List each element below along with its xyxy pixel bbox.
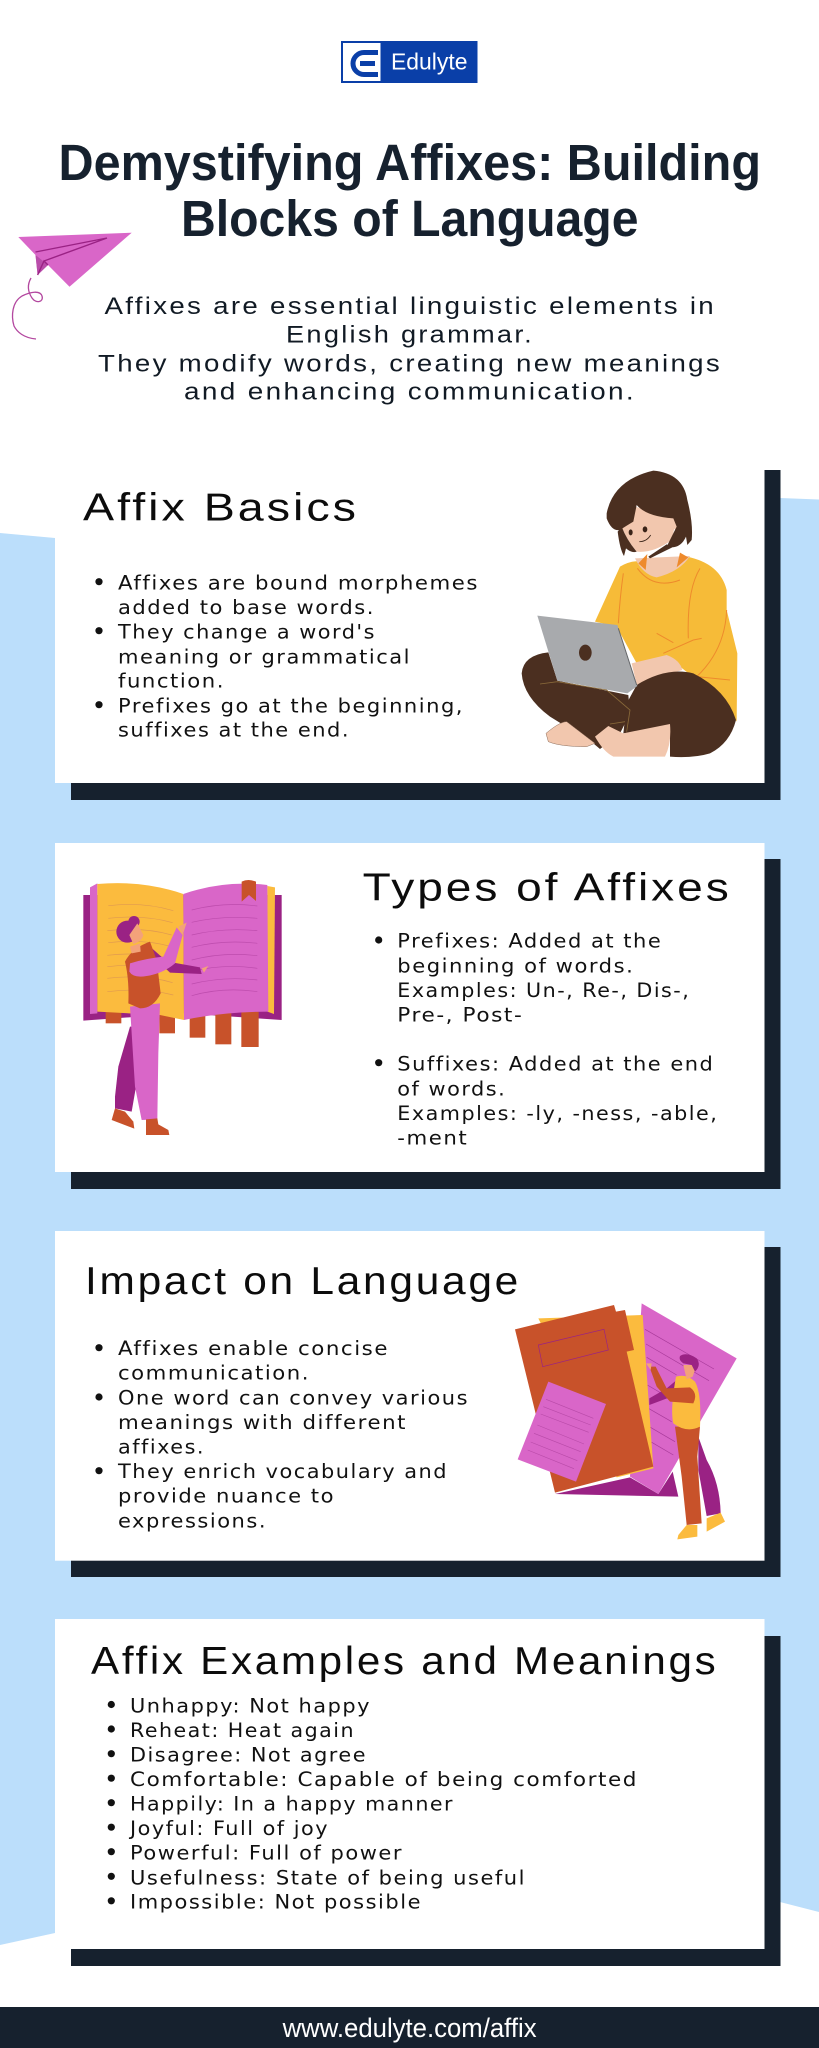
title: Blocks of Language [181,190,638,247]
illustration: person with documents [515,1303,737,1539]
list: affix basics points: function. [118,670,225,693]
list: affix basics points: Prefixes go at the beginning, [118,694,464,717]
logo: Edulyte: Edulyte [391,48,468,74]
heading: Types of Affixes: Types of Affixes [363,867,732,910]
list: affix examples: Reheat: Heat again [130,1719,355,1742]
logo: Edulyte [341,41,478,83]
list: affix examples: Joyful: Full of joy [128,1817,329,1840]
intro text: English grammar. [286,322,534,349]
panel: Types of Affixes [55,843,780,1189]
list: affix examples: Usefulness: State of being useful [130,1866,526,1889]
list: affix examples: Disagree: Not agree [130,1744,367,1767]
list: prefixes and suffixes: Examples: Un-, Re-, Dis-, [397,979,690,1002]
title [58,134,761,247]
heading: Affix Basics: Affix Basics [83,487,359,530]
panel: Impact on Language [55,1231,780,1577]
list: affix basics points: added to base words. [118,596,375,619]
list: impact points: affixes. [118,1435,205,1458]
list: affix examples: Impossible: Not possible [130,1891,422,1914]
list: impact points: meanings with different [118,1411,407,1434]
intro text [98,293,722,406]
list: prefixes and suffixes: Prefixes: Added at the [397,930,662,953]
intro text: and enhancing communication. [184,379,636,406]
list: impact points: expressions. [118,1509,267,1532]
list: affix basics points: meaning or grammatical [118,645,411,668]
list: impact points: Affixes enable concise [118,1337,389,1360]
footer bar with URL: www.edulyte.com/affix [282,2013,537,2043]
list: affix examples: Powerful: Full of power [130,1842,403,1865]
intro text: Affixes are essential linguistic elements in [104,293,716,320]
panel: Affix Basics [55,453,780,800]
list: affix examples: Unhappy: Not happy [130,1694,371,1717]
list: prefixes and suffixes: beginning of words. [397,954,634,977]
background: light blue band [0,498,819,1945]
list: impact points [95,1337,469,1532]
illustration: person with open book [83,880,282,1135]
list: impact points: One word can convey various [118,1386,469,1409]
list: impact points: They enrich vocabulary and [117,1460,448,1483]
list: impact points: provide nuance to [118,1485,335,1508]
list: impact points: communication. [118,1362,310,1385]
intro text: They modify words, creating new meanings [98,350,722,377]
list: prefixes and suffixes: of words. [397,1077,506,1100]
list: affix basics points: suffixes at the end. [118,719,350,742]
list: affix examples: Happily: In a happy manner [130,1793,454,1816]
heading: Impact on Language: Impact on Language [85,1260,521,1303]
list: affix basics points: Affixes are bound morphemes [118,571,479,594]
footer bar with URL [0,2007,819,2048]
list: affix examples [108,1694,638,1914]
list: affix basics points [95,571,479,742]
title: Demystifying Affixes: Building [58,134,761,191]
illustration: woman with laptop [522,471,737,757]
list: affix basics points: They change a word's [117,620,376,643]
panel: Affix Examples and Meanings [55,1619,780,1966]
list: prefixes and suffixes [375,930,718,1150]
list: prefixes and suffixes: Examples: -ly, -ness, -able, [397,1102,718,1125]
icon: paper plane [13,233,132,339]
heading: Affix Examples and Meanings: Affix Examples and Meanings [91,1640,718,1683]
list: prefixes and suffixes: Suffixes: Added at the end [397,1053,714,1076]
list: affix examples: Comfortable: Capable of being comforted [130,1768,638,1791]
list: prefixes and suffixes: Pre-, Post- [397,1004,523,1027]
list: prefixes and suffixes: -ment [397,1127,468,1150]
